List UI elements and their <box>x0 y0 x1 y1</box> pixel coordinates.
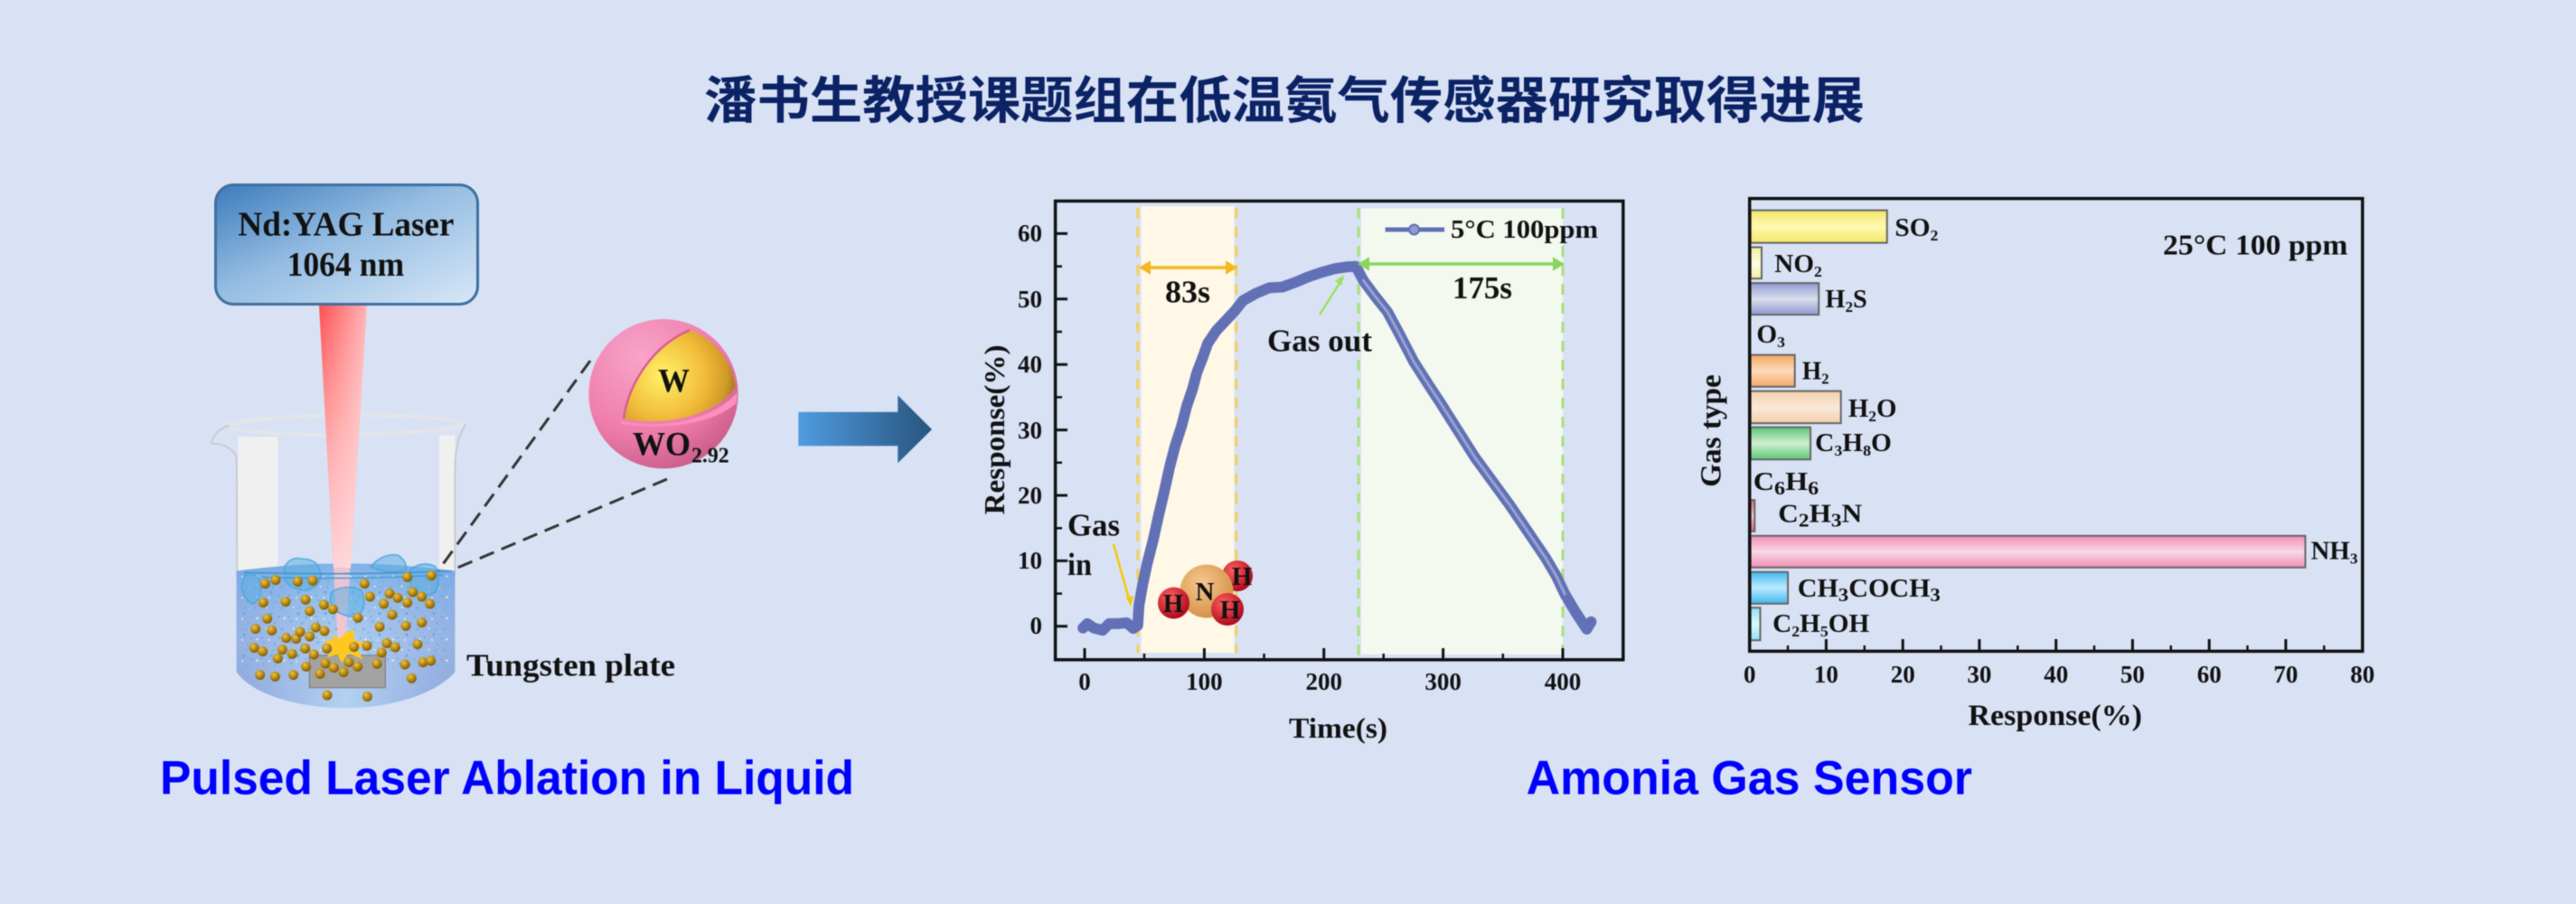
x axis tick labels: 400 <box>1545 668 1581 695</box>
gas in annotation: in <box>1067 547 1092 582</box>
gas labels <box>1753 214 2358 640</box>
gas labels: NH <box>2311 537 2349 565</box>
zoom lines <box>438 361 667 570</box>
legend: 5°C 100ppm <box>1451 216 1598 244</box>
x axis tick labels: 80 <box>2350 661 2374 688</box>
y axis tick labels: 60 <box>1018 220 1042 247</box>
shaded zones <box>1138 206 1563 656</box>
x axis tick labels: 300 <box>1424 668 1462 695</box>
x axis tick labels: 100 <box>1186 668 1223 695</box>
gas labels: 3 <box>2350 550 2358 567</box>
gas labels: 2 <box>1799 510 1810 532</box>
gas labels: 3 <box>1838 584 1848 606</box>
axis titles: Response(%) <box>978 344 1011 514</box>
laser source box <box>215 184 477 304</box>
x axis tick labels <box>1078 668 1581 695</box>
x axis tick labels: 50 <box>2120 661 2145 688</box>
y axis tick labels: 50 <box>1018 286 1042 313</box>
legend <box>1386 216 1598 244</box>
gas labels: S <box>1853 286 1867 314</box>
ammonia molecule: H <box>1232 562 1253 591</box>
gas labels: 2 <box>1821 371 1829 388</box>
gas in annotation: Gas <box>1067 508 1120 543</box>
laser source box: Nd:YAG Laser <box>238 205 455 243</box>
gas labels: OH <box>1829 610 1869 638</box>
gas labels: SO <box>1894 214 1929 242</box>
gas labels: H <box>1802 358 1822 386</box>
gas labels: N <box>1842 501 1862 529</box>
y axis tick labels: 0 <box>1030 612 1042 639</box>
core-shell nanoparticle: W <box>658 363 690 400</box>
x axis tick labels: 60 <box>2197 661 2222 688</box>
tungsten plate label: Tungsten plate <box>466 647 675 683</box>
gas labels: 5 <box>1820 623 1829 640</box>
axis titles <box>1696 374 2142 732</box>
x axis tick labels: 10 <box>1814 661 1838 688</box>
y axis tick labels: 40 <box>1018 351 1042 378</box>
condition label: 25°C 100 ppm <box>2163 229 2348 261</box>
gas labels: H <box>1825 286 1845 314</box>
gas labels: COCH <box>1848 575 1931 603</box>
beaker <box>211 415 465 576</box>
recovery time marker: 175s: 175s <box>1453 270 1512 306</box>
plot frame and ticks <box>1750 199 2363 651</box>
gas labels: 6 <box>1808 477 1819 499</box>
gas labels: C <box>1753 468 1772 496</box>
y axis tick labels <box>1018 220 1042 639</box>
heading: pulsed laser ablation in liquid: Pulsed Laser Ablation in Liquid <box>160 751 854 805</box>
gas labels: 2 <box>1931 227 1938 244</box>
gas labels: 6 <box>1774 477 1785 499</box>
bars <box>1751 211 2306 640</box>
gas labels: CH <box>1798 575 1836 603</box>
gas labels: C <box>1815 429 1833 457</box>
core-shell nanoparticle <box>588 319 738 468</box>
x axis tick labels: 40 <box>2044 661 2068 688</box>
gas labels: H <box>1785 468 1808 496</box>
axis titles: Gas type <box>1696 374 1728 487</box>
gas labels: H <box>1842 429 1863 457</box>
laser beam <box>319 306 367 568</box>
gas out annotation <box>1267 275 1372 359</box>
response time marker: 83s <box>1141 262 1236 310</box>
chart: response vs time <box>978 201 1623 744</box>
ammonia molecule: H <box>1163 589 1184 618</box>
gas labels: 2 <box>1791 623 1800 640</box>
gas labels: O <box>1871 429 1892 457</box>
plot frame and ticks <box>1056 201 1623 660</box>
gas labels: 3 <box>1834 442 1842 459</box>
x axis tick labels: 20 <box>1891 661 1915 688</box>
laser beam lower part <box>332 542 352 663</box>
x axis tick labels: 200 <box>1305 668 1342 695</box>
gas labels: 3 <box>1831 510 1842 532</box>
axis titles: Response(%) <box>1969 700 2142 732</box>
panel: pulsed laser ablation schematic <box>211 184 738 708</box>
x axis tick labels <box>1744 661 2374 688</box>
gas out annotation: Gas out <box>1267 324 1372 359</box>
core-shell nanoparticle: WO <box>633 426 691 463</box>
axis titles: Time(s) <box>1289 711 1387 744</box>
axis titles <box>978 344 1387 744</box>
gas labels: 8 <box>1863 442 1871 459</box>
gas labels: NO <box>1774 250 1812 278</box>
title: 潘书生教授课题组在低温氨气传感器研究取得进展 <box>704 61 1865 134</box>
gas labels: C <box>1778 501 1797 529</box>
gas labels: 3 <box>1777 334 1785 351</box>
ammonia molecule: H <box>1220 596 1241 625</box>
y axis tick labels: 30 <box>1018 417 1042 444</box>
x axis tick labels: 70 <box>2273 661 2298 688</box>
gas labels: 2 <box>1845 298 1853 315</box>
laser source box: 1064 nm <box>287 246 404 284</box>
gas labels: O <box>1756 321 1776 349</box>
chart: selectivity bar chart <box>1696 199 2374 732</box>
water and particles <box>237 542 455 708</box>
gas labels: 3 <box>1931 584 1941 606</box>
gas labels: O <box>1876 395 1896 423</box>
core-shell nanoparticle: 2.92 <box>691 445 729 468</box>
recovery time marker: 175s <box>1359 259 1563 306</box>
ammonia molecule <box>1158 560 1253 626</box>
response time marker: 83s: 83s <box>1165 275 1210 310</box>
response curve <box>1083 267 1591 630</box>
gas labels: H <box>1848 395 1868 423</box>
gas labels: 2 <box>1868 408 1876 425</box>
arrow <box>798 395 932 463</box>
ammonia molecule: N <box>1196 578 1215 607</box>
y axis tick labels: 10 <box>1018 547 1042 574</box>
gas in annotation <box>1067 508 1133 607</box>
x axis tick labels: 0 <box>1744 661 1755 688</box>
x axis tick labels: 30 <box>1967 661 1991 688</box>
x axis tick labels: 0 <box>1078 668 1091 695</box>
gas labels: H <box>1810 501 1831 529</box>
gas labels: C <box>1772 610 1791 638</box>
gas labels: H <box>1800 610 1820 638</box>
heading: ammonia gas sensor: Amonia Gas Sensor <box>1527 751 1972 805</box>
y axis tick labels: 20 <box>1018 482 1042 509</box>
gas labels: 2 <box>1814 263 1822 280</box>
